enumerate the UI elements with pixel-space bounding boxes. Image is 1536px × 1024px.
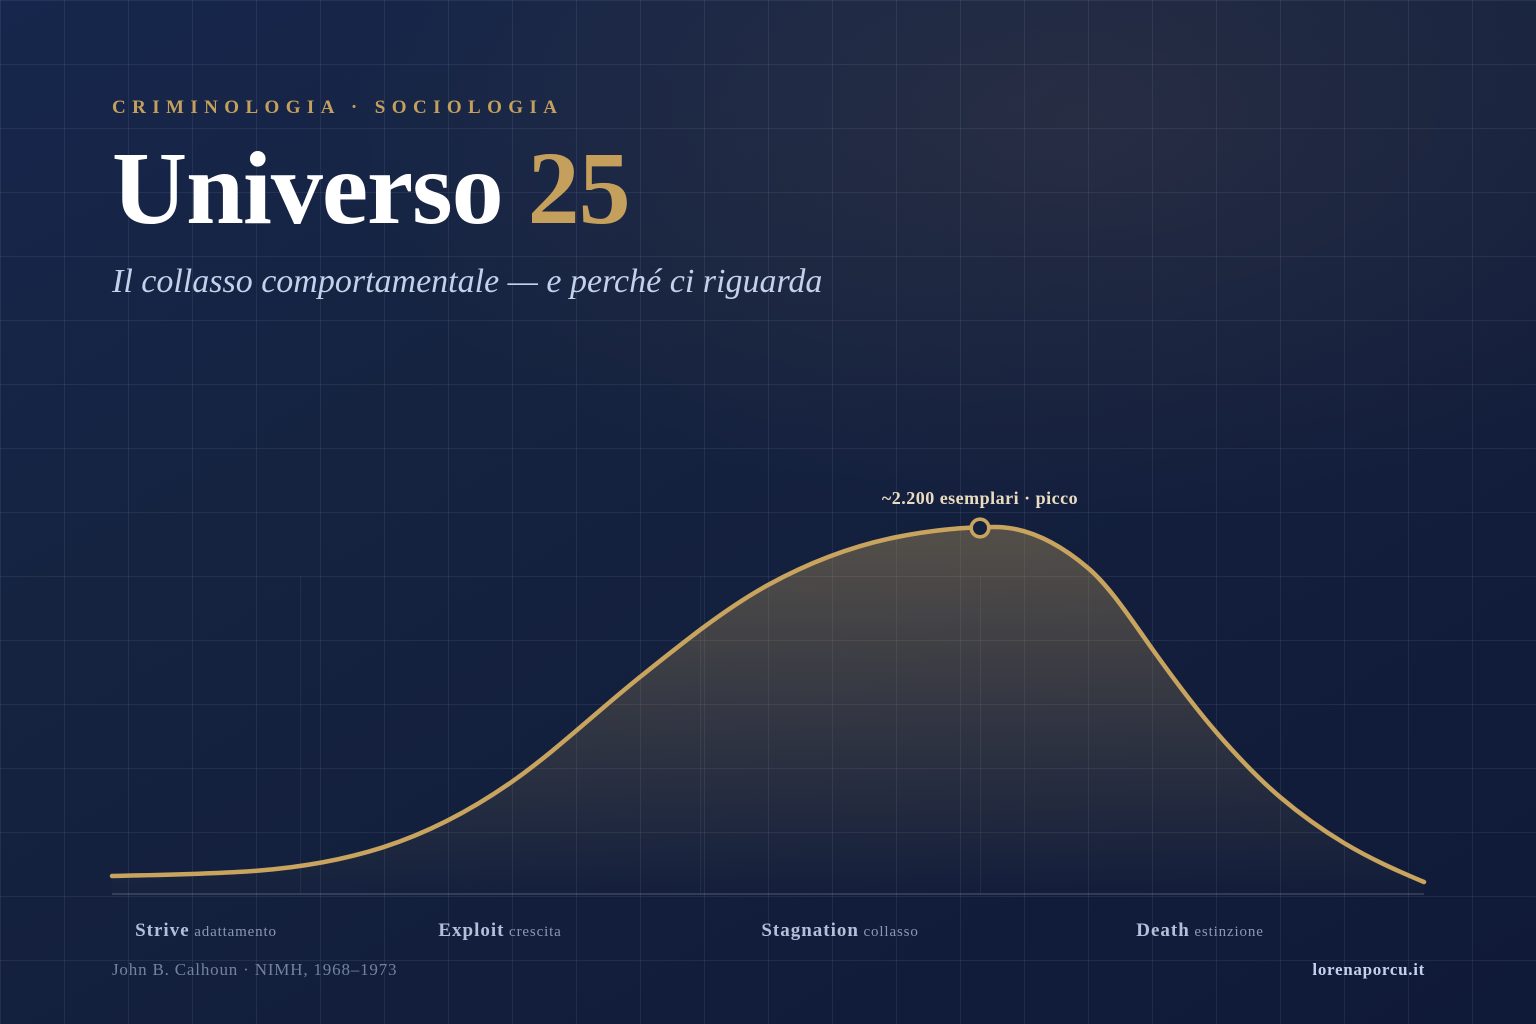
population line xyxy=(112,527,1424,882)
source credit: John B. Calhoun · NIMH, 1968–1973 xyxy=(112,960,397,979)
phase label: Stagnation: Stagnation collasso xyxy=(761,920,919,941)
phase label: Strive: Strive adattamento xyxy=(135,920,277,941)
area under curve xyxy=(112,527,1424,893)
title: Universo 25 xyxy=(112,131,630,246)
eyebrow: discipline label: CRIMINOLOGIA · SOCIOLOGIA xyxy=(112,97,563,118)
subtitle: Il collasso comportamentale — e perché ci riguarda xyxy=(112,263,822,300)
peak annotation: ~2.200 esemplari · picco xyxy=(882,488,1078,508)
website: lorenaporcu.it xyxy=(1312,960,1425,979)
phase label: Death: Death estinzione xyxy=(1136,920,1264,941)
baseline axis xyxy=(112,893,1424,895)
phase label: Exploit: Exploit crescita xyxy=(438,920,562,941)
peak marker xyxy=(971,519,989,537)
phase dividers xyxy=(300,576,980,893)
